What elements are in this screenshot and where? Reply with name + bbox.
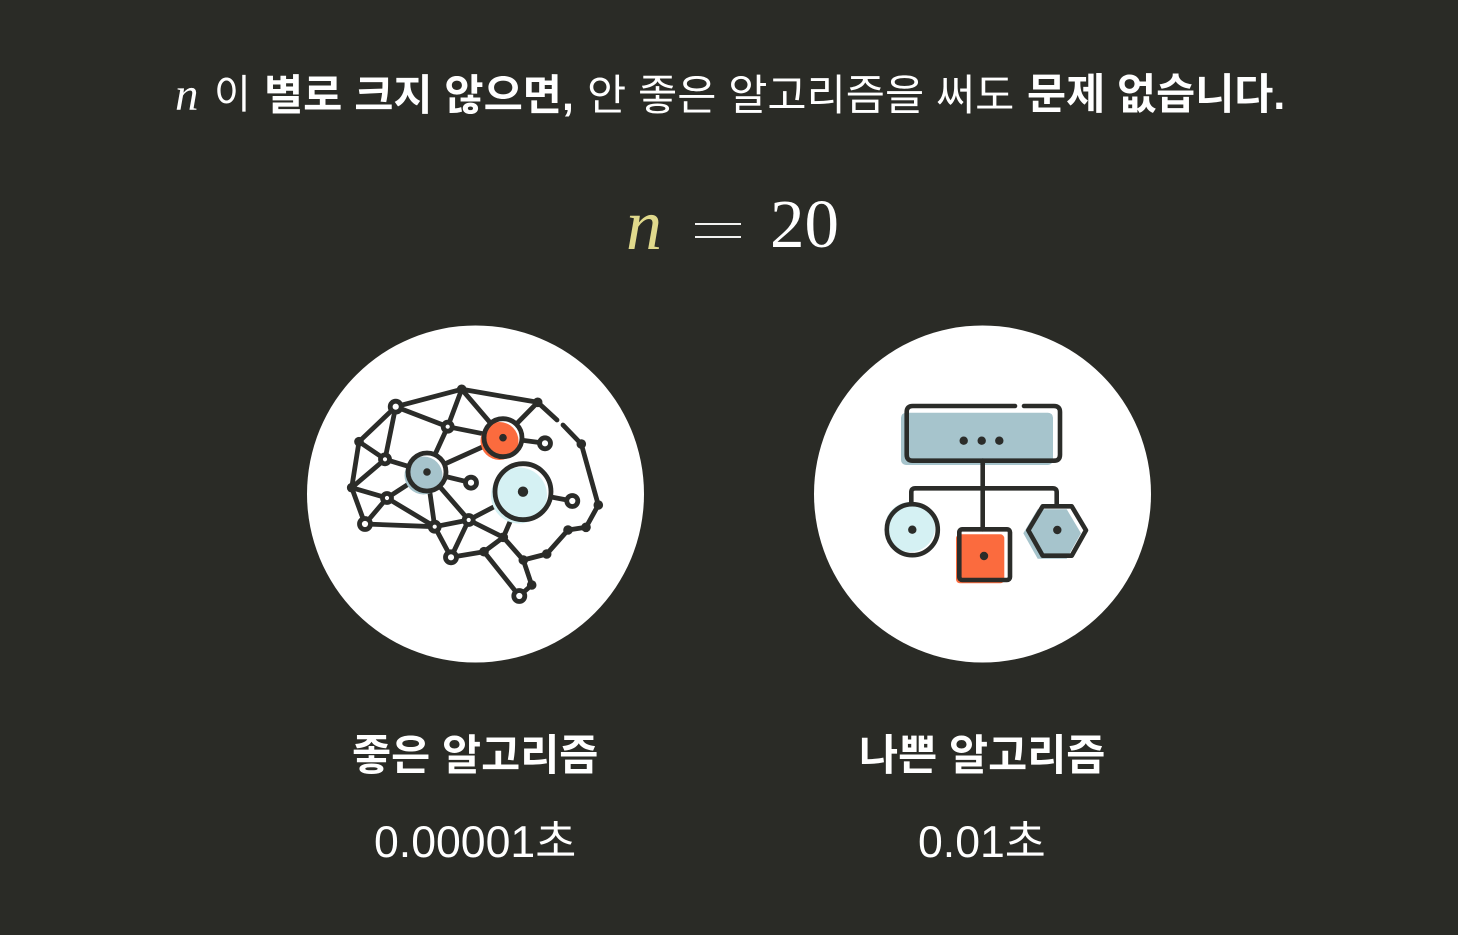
equation n = 20: n <box>626 185 662 265</box>
label: good algorithm: 좋은 알고리즘 <box>352 733 598 780</box>
label: bad algorithm: 나쁜 알고리즘 <box>859 733 1105 780</box>
title: n <box>175 69 198 121</box>
title: 이 <box>214 73 251 117</box>
label: bad algorithm time: 0.01초 <box>918 818 1046 867</box>
label: good algorithm time: 0.00001초 <box>374 818 576 867</box>
title: 별로 크지 않으면, <box>264 72 574 120</box>
equation n = 20: 20 <box>770 186 839 262</box>
equation n = 20 <box>626 185 839 265</box>
title <box>175 69 1285 121</box>
title: 문제 없습니다. <box>1027 72 1285 119</box>
large nodes <box>404 419 551 524</box>
title: 안 좋은 알고리즘을 써도 <box>587 72 1014 120</box>
